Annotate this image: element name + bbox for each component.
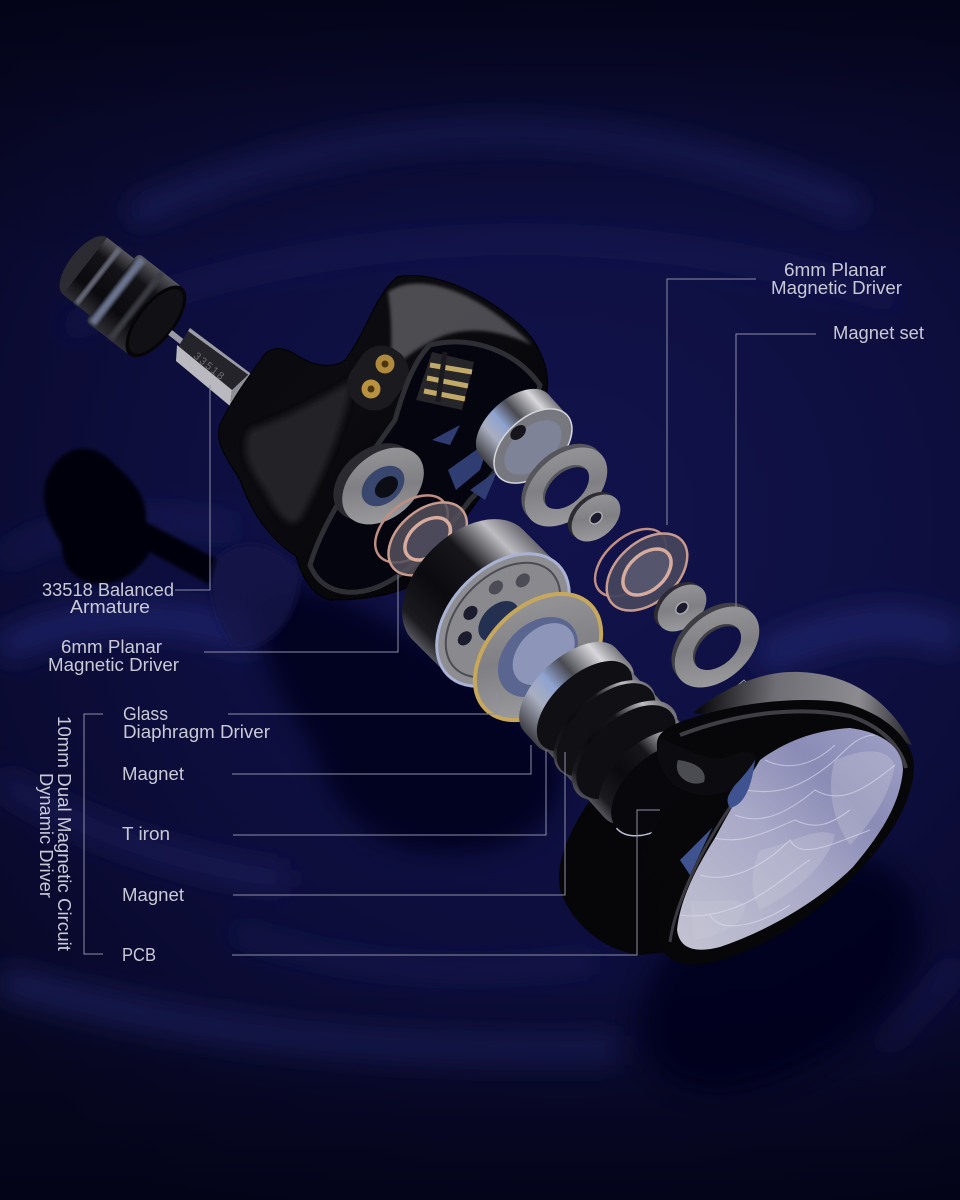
washer: magnet set ring: [656, 587, 775, 704]
right copper planar driver rings: [583, 509, 702, 626]
label: 10mm dual magnetic circuit dynamic driver: 10mm Dual Magnetic Circuit: [54, 716, 74, 951]
label: 10mm dual magnetic circuit dynamic driver: Dynamic Driver: [36, 773, 56, 898]
stack segment one: [524, 648, 629, 746]
leader: magnet two: [233, 752, 565, 895]
label: 6mm planar magnetic driver, right: 6mm Planar: [784, 260, 886, 280]
cable plug shadow object: [44, 449, 300, 650]
label: glass diaphragm driver: Diaphragm Driver: [123, 722, 270, 742]
earphone rear shell: [218, 276, 548, 600]
label: 33518 balanced armature: Armature: [70, 597, 150, 617]
left copper planar driver rings: [363, 476, 481, 592]
shell soft body reflection: [246, 380, 352, 523]
leader: magnet one: [232, 745, 531, 774]
lens scale facets: [690, 751, 895, 940]
leader: T iron: [233, 750, 546, 835]
label: T iron: T iron: [122, 824, 170, 844]
gold balanced armature stack in cavity: [416, 352, 474, 410]
faceplate body: [640, 700, 914, 965]
stack final dark segment with glass rim: [594, 726, 725, 853]
dark rear body behind faceplate: [559, 770, 700, 955]
label: 6mm planar magnetic driver, left: 6mm Planar: [61, 637, 162, 657]
label: 6mm planar magnetic driver, left: [48, 637, 179, 675]
leader: PCB: [232, 810, 660, 955]
washer: large upper: [506, 428, 622, 542]
shell gloss highlight: [388, 284, 532, 375]
stack segment three: [561, 690, 669, 791]
two-pin connector sockets: [338, 336, 418, 420]
leader: magnet set: [736, 334, 816, 610]
label: PCB: PCB: [122, 945, 156, 965]
leader: left planar driver: [204, 575, 398, 652]
washer: small lower: [645, 572, 716, 642]
label: 6mm planar magnetic driver, right: Magnetic Driver: [771, 278, 902, 298]
upper metal cup: [463, 375, 586, 498]
icon: metal nozzle cylinder: [46, 222, 209, 376]
label: 33518 balanced armature: [42, 580, 174, 617]
teardrop highlight on the shell: [658, 738, 757, 795]
label: magnet one: Magnet: [122, 764, 184, 784]
leader: balanced armature: [175, 385, 210, 590]
lens scale lines: [680, 735, 895, 926]
faceplate top sheen: [693, 672, 912, 745]
lavender scaled lens: [677, 728, 903, 950]
label: 6mm planar magnetic driver, right: [771, 260, 902, 298]
label: 33518 balanced armature: 33518 Balanced: [42, 580, 174, 600]
leader: glass diaphragm: [228, 693, 497, 714]
dynamic driver magnet and iron stack: [501, 623, 730, 857]
front faceplate shell: [640, 672, 914, 965]
inner cavity: [310, 342, 540, 592]
label: glass diaphragm driver: Glass: [123, 704, 168, 724]
leader: right planar driver: [667, 279, 756, 525]
label: glass diaphragm driver: [123, 704, 270, 742]
gold-ringed glass diaphragm: [450, 569, 626, 745]
label: 6mm planar magnetic driver, left: Magnetic Driver: [48, 655, 179, 675]
left grey disc: [318, 425, 439, 543]
bracket: dynamic driver group: [84, 714, 103, 954]
small pin: [735, 680, 752, 698]
blue cavity glints: [432, 425, 498, 500]
washer: small upper: [559, 482, 630, 552]
label: 10mm dual magnetic circuit dynamic driver: [36, 716, 74, 951]
label: magnet set: Magnet set: [833, 323, 924, 343]
stack segment two: [542, 667, 648, 767]
component: 33518 balanced armature: [176, 328, 250, 406]
perforation holes: [444, 561, 564, 681]
reflection shadows on the surface: [250, 588, 920, 1092]
faceplate rim reflection: [670, 800, 735, 942]
large cylinder with perforated face: [377, 494, 595, 712]
leader lines: [84, 279, 816, 955]
component: 33518 balanced armature: 33518: [191, 350, 226, 383]
T iron nub: [537, 658, 596, 714]
label: magnet two: Magnet: [122, 885, 184, 905]
stack segment four: [582, 712, 693, 818]
